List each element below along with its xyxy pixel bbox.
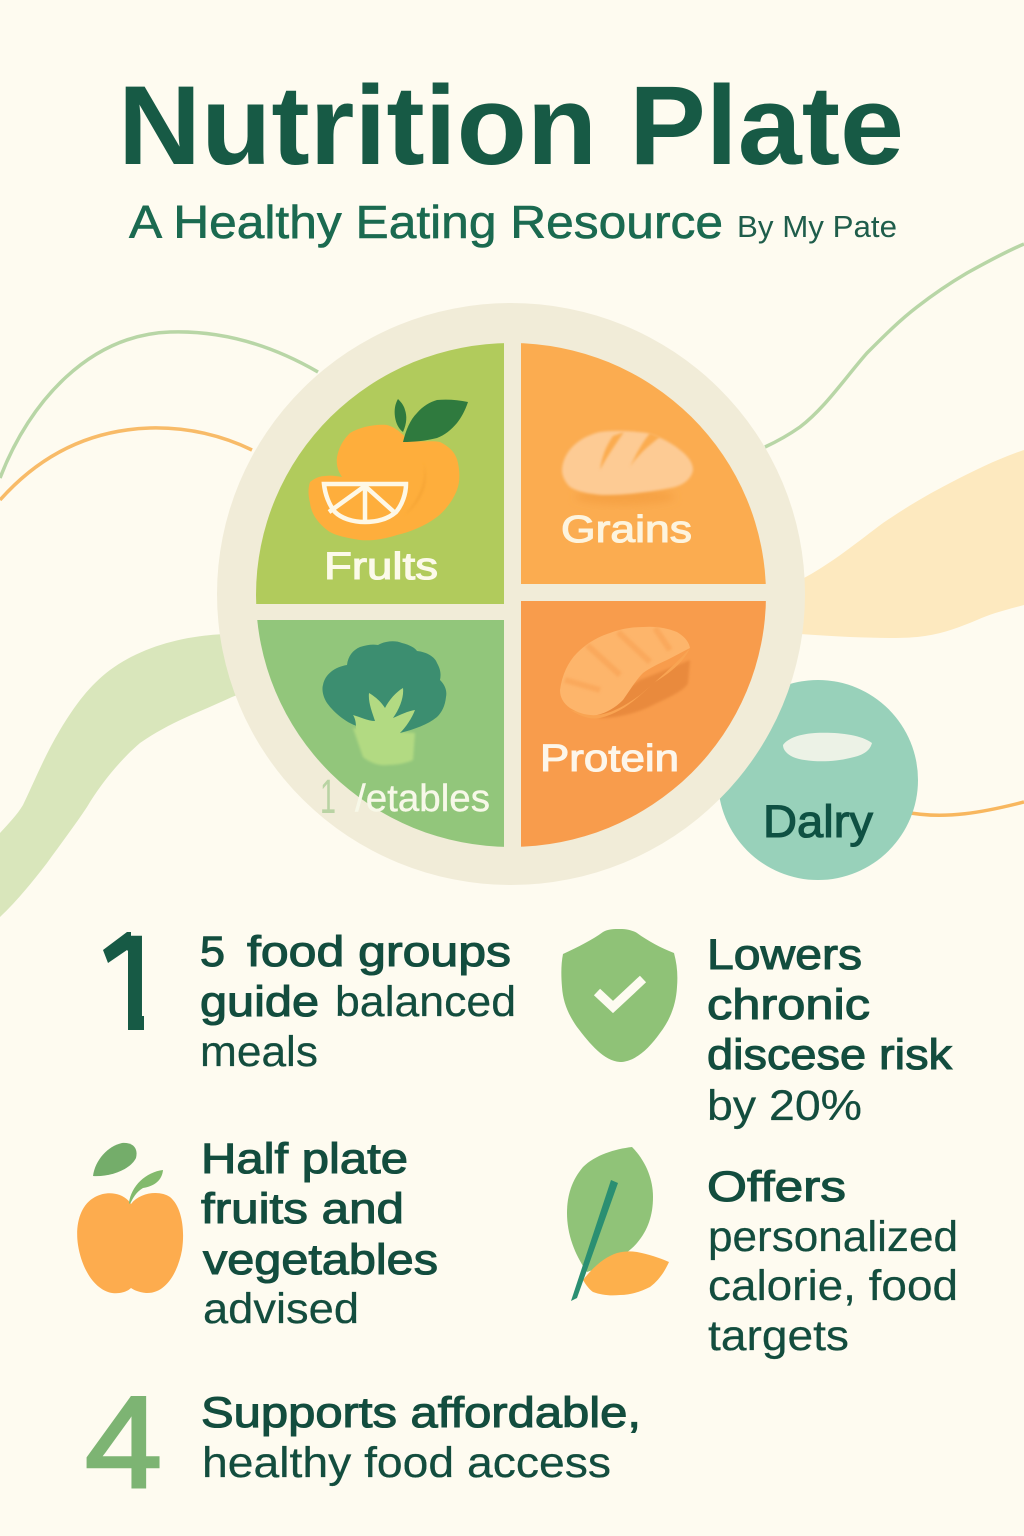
text: affordable: [201, 1389, 641, 1487]
icon: dairy disc: [783, 733, 872, 761]
label: fruits: Frults: [324, 546, 438, 588]
panel: fruits: [250, 335, 504, 604]
stat 1: 5 food groups: [103, 932, 514, 1067]
panel: vegetables: [250, 620, 504, 855]
text: personalized: targets: [708, 1312, 849, 1360]
text: personalized: personalized: [708, 1213, 958, 1261]
label: protein: Protein: [540, 738, 679, 780]
text: food groups: balanced: [335, 978, 516, 1026]
title: Nutrition Plate: [118, 63, 904, 188]
number: 4: 4: [85, 1369, 162, 1515]
text: food groups: meals: [200, 1028, 318, 1076]
text: half plate: advised: [203, 1285, 359, 1333]
text: disease risk: chronic: [707, 981, 870, 1029]
text: disease risk: discese risk: [707, 1031, 953, 1079]
label: grains: Grains: [561, 509, 692, 551]
text: half plate: Half plate: [201, 1135, 408, 1183]
text: food groups: guide: [200, 978, 319, 1026]
dairy circle: [718, 680, 918, 880]
stat 4: personalized targets: [567, 1147, 958, 1360]
icon: salmon: [560, 627, 690, 719]
label: vegetables: [320, 771, 490, 824]
icon: apple: [77, 1143, 183, 1293]
text: food groups: 5: [200, 928, 225, 976]
panel: grains: [521, 335, 771, 584]
icon: leaf: [567, 1147, 669, 1301]
text: half plate: vegetables: [203, 1236, 438, 1284]
background waves: [0, 244, 1024, 917]
icon: shield: [561, 929, 677, 1062]
text: affordable: healthy food access: [202, 1439, 611, 1487]
number: 1: [103, 932, 144, 1030]
panel: protein: [521, 601, 771, 851]
number: 1: 1: [102, 907, 162, 1060]
stat 2: chronic disease: [561, 929, 953, 1130]
text: personalized: calorie, food: [708, 1262, 958, 1310]
text: disease risk: [707, 931, 953, 1130]
label: Dairy: Dalry: [763, 796, 874, 847]
subtitle: By My Pate: [737, 209, 897, 244]
text: half plate: [201, 1135, 438, 1333]
text: half plate: fruits and: [201, 1185, 404, 1233]
text: personalized: [707, 1163, 958, 1360]
text: disease risk: Lowers: [707, 931, 862, 979]
text: personalized: Offers: [707, 1163, 846, 1211]
icon: bread: [562, 431, 693, 505]
subtitle: A Healthy Eating Resource: [129, 196, 723, 248]
label: vegetables: 1: [320, 771, 336, 824]
text: affordable: Supports affordable,: [201, 1389, 641, 1437]
icon: broccoli: [322, 641, 446, 765]
text: disease risk: by 20%: [707, 1082, 862, 1130]
label: vegetables: /etables: [355, 778, 490, 820]
text: food groups: food groups: [247, 928, 511, 976]
stat 3: half plate: [77, 1135, 438, 1333]
icon: orange with leaf: [308, 399, 468, 540]
plate: [217, 303, 805, 885]
stat 5: affordable access: [85, 1369, 641, 1515]
text: food groups: [200, 928, 516, 1076]
